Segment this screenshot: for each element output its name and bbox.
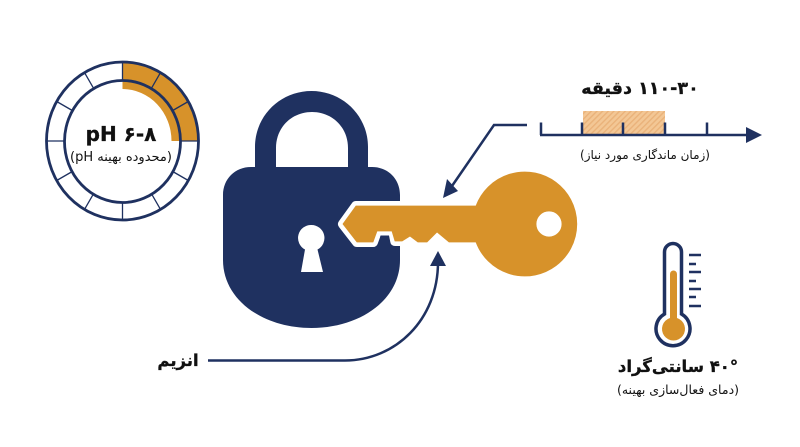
label: enzyme: انزیم xyxy=(157,351,199,371)
icon: padlock xyxy=(223,91,400,328)
heading: temperature value: ۴۰° سانتی‌گراد xyxy=(618,356,738,377)
key: white outline xyxy=(343,206,476,242)
icon: key xyxy=(343,172,577,276)
arrow: residence time to key xyxy=(443,125,527,198)
panel: pH range gauge xyxy=(46,62,198,220)
chart: time axis xyxy=(540,122,762,143)
gauge: rings and ticks xyxy=(46,62,198,220)
panel: temperature xyxy=(617,244,739,398)
key: lock visible through notch xyxy=(378,236,392,248)
icon: thermometer xyxy=(656,244,701,346)
key: shaft and bow xyxy=(343,172,577,276)
arrow: enzyme to key xyxy=(208,251,446,360)
panel: residence time timeline xyxy=(540,79,762,163)
gauge: orange optimal segment xyxy=(122,62,198,141)
heading: time range: ۳۰‏-‏۱۱۰ دقیقه xyxy=(581,79,699,99)
text: time caption: (زمان ماندگاری مورد نیاز) xyxy=(580,148,710,163)
chart: hatched range xyxy=(583,111,665,135)
heading: pH value: pH ۶-۸ xyxy=(86,122,156,146)
text: temperature caption: (دمای فعال‌سازی بهینه) xyxy=(617,382,739,398)
text: pH caption: (محدوده بهینه pH) xyxy=(70,150,172,165)
